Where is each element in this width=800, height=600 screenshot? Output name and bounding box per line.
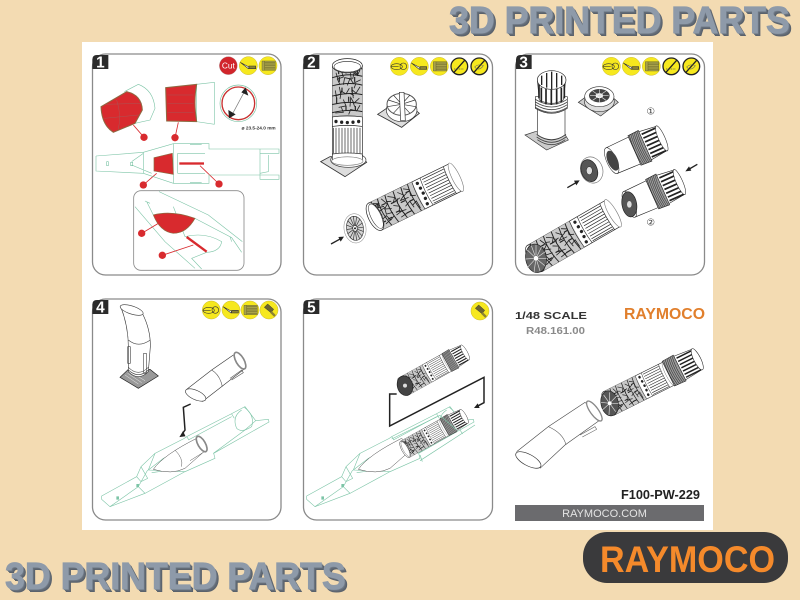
panel 6: product information [513, 306, 707, 521]
panel 1: cut the fuselage [92, 54, 281, 275]
website bar: RAYMOCO.COM [562, 508, 647, 520]
panel 5: insert the engine into the fuselage: 5 [307, 300, 316, 317]
panel 1: cut the fuselage: ⌀ 23.5-24.0 mm [242, 126, 276, 131]
scale label: 1/48 SCALE [515, 311, 587, 322]
panel 3: assemble the nozzle: ② [646, 218, 655, 228]
panel 3: assemble the nozzle: ① [646, 106, 655, 116]
panel 3: assemble the nozzle [516, 54, 704, 275]
panel 5: insert the engine into the fuselage [303, 299, 492, 520]
panel 3: assemble the nozzle: 3 [519, 55, 528, 72]
title top right: 3D PRINTED PARTS [449, 0, 790, 42]
panel 4: fit the intake duct [92, 299, 281, 520]
brand logo small: RAYMOCO [624, 306, 705, 323]
panel 1: cut the fuselage: Cut [222, 61, 235, 71]
website bar [515, 505, 704, 521]
panel 4: fit the intake duct: 4 [96, 300, 105, 317]
engine name: F100-PW-229 [621, 487, 700, 502]
raymoco logo badge: RAYMOCO [600, 539, 775, 580]
panel 1: cut the fuselage: 1 [96, 55, 105, 72]
assembled engine illustration [513, 345, 707, 472]
white instruction sheet [82, 42, 713, 530]
panel 2: assemble the engine core [303, 54, 492, 275]
panel 2: assemble the engine core: 2 [307, 55, 316, 72]
product code: R48.161.00 [526, 325, 585, 337]
title bottom left: 3D PRINTED PARTS [5, 556, 346, 598]
